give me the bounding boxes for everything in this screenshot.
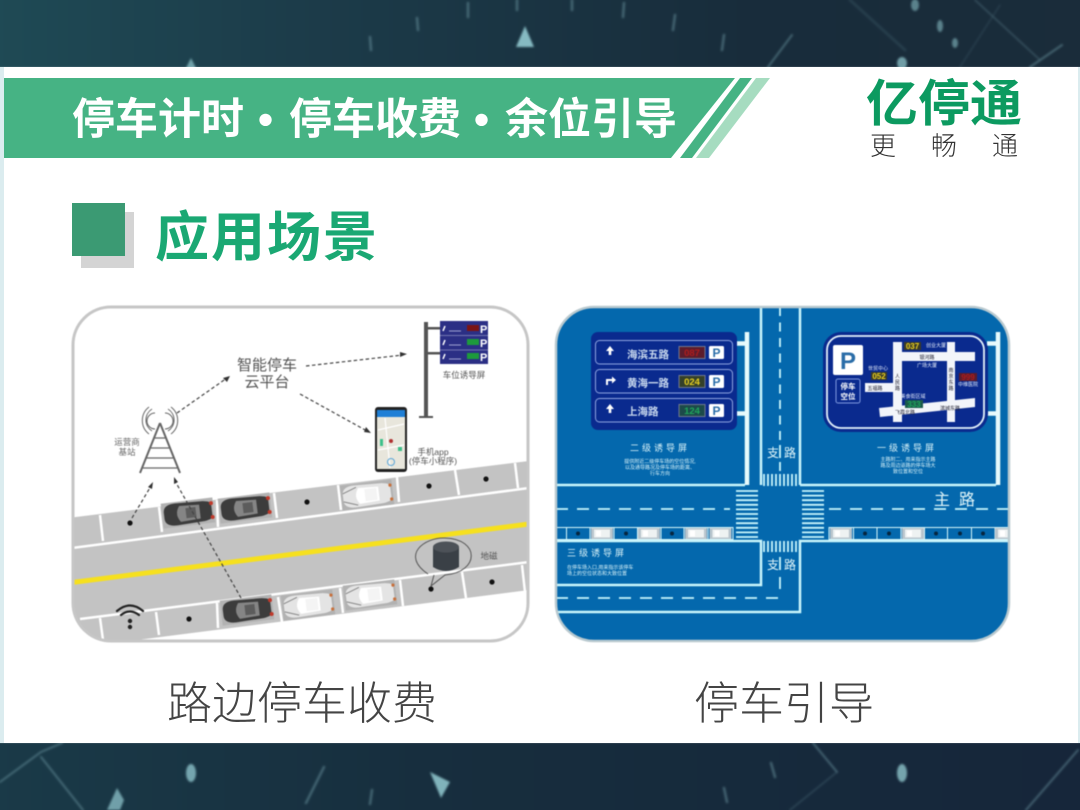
panel border <box>556 307 1009 641</box>
secondary caption <box>624 442 696 477</box>
screen label: 车位诱导屏 <box>443 370 486 380</box>
primary guidance sign: 民 <box>895 380 900 386</box>
caption: parking guidance: 停车引导 <box>694 678 874 729</box>
primary caption: 致位置和空位 <box>893 468 923 475</box>
primary guidance sign: 停车 <box>840 381 856 391</box>
parking strip <box>556 528 1017 540</box>
arrows: data flow <box>132 352 407 598</box>
phone label: (停车小程序) <box>409 456 457 466</box>
guidance screen on pole: P <box>480 338 487 350</box>
icon: phone app <box>375 407 407 472</box>
secondary guidance sign: 087 <box>684 348 700 359</box>
secondary caption: 提供附近二级停车场的空位情况, <box>624 458 696 465</box>
guidance screen on pole: P <box>480 324 487 336</box>
heading marker icon <box>72 203 134 268</box>
cloud platform label: 云平台 <box>244 374 290 391</box>
primary guidance sign: 空位 <box>840 391 856 401</box>
tower label: 运营商 <box>114 437 140 447</box>
primary guidance sign: 创业大厦 <box>926 342 946 349</box>
road labels: 支 <box>767 558 779 572</box>
panel border <box>73 307 528 641</box>
secondary guidance sign: 024 <box>684 377 701 388</box>
logo slogan: 畅 <box>931 131 957 161</box>
tertiary caption: 在停车场入口,用来指示该停车 <box>567 564 633 571</box>
primary guidance sign <box>823 332 988 432</box>
primary guidance sign: 999 <box>961 373 975 382</box>
secondary guidance sign: 海滨五路 <box>627 348 669 361</box>
icon: geomagnetic sensor <box>416 538 471 586</box>
tertiary caption: 场上的空位状态和大致位置 <box>567 570 627 577</box>
secondary caption: 二级诱导屏 <box>630 442 690 453</box>
primary guidance sign: 路 <box>948 385 954 392</box>
primary guidance sign: 京 <box>948 373 954 380</box>
guidance screen on pole: P <box>480 352 487 364</box>
logo <box>866 76 1022 161</box>
phone label: 手机app <box>417 447 449 457</box>
banner title: • <box>474 96 489 144</box>
primary guidance sign: 滨城东路 <box>940 405 960 412</box>
primary caption: 一级诱导屏 <box>877 442 937 453</box>
cloud platform label: 智能停车 <box>237 356 297 374</box>
primary guidance sign: 东 <box>948 379 954 386</box>
secondary guidance sign: P <box>712 375 721 389</box>
sensor label: 地磁 <box>480 551 498 561</box>
yellow centre line <box>72 524 529 582</box>
road labels: 路 <box>959 491 975 509</box>
primary guidance sign: 南 <box>948 367 954 374</box>
road scene <box>72 461 529 650</box>
banner title: • <box>258 96 273 144</box>
guidance screen on pole <box>419 321 488 418</box>
road labels: 路 <box>784 445 796 460</box>
primary guidance sign: 美食街区域 <box>900 393 926 400</box>
secondary guidance sign <box>591 332 737 430</box>
guidance captions <box>567 442 937 577</box>
parked cars <box>161 479 397 626</box>
logo slogan: 更 <box>870 131 896 161</box>
primary guidance sign: 银河路 <box>919 354 935 361</box>
secondary guidance sign: 上海路 <box>627 405 659 418</box>
logo slogan: 通 <box>992 131 1018 161</box>
tertiary caption <box>567 547 633 577</box>
background: dark tech top band <box>0 0 1080 69</box>
primary guidance sign: 333 <box>907 400 921 409</box>
background: dark tech bottom band <box>0 742 1080 810</box>
secondary caption: 以及通导路况及停车场的距离、 <box>625 464 695 471</box>
secondary guidance sign: 124 <box>684 406 701 417</box>
secondary caption: 行车方向 <box>650 470 670 477</box>
banner title: 停车收费 <box>289 96 461 144</box>
crosswalks <box>736 491 758 537</box>
primary guidance sign: 中维医院 <box>958 381 978 388</box>
banner title: 余位引导 <box>505 96 677 144</box>
primary caption: 主路附二、用来指示主路 <box>880 456 936 463</box>
road network <box>555 307 1010 612</box>
panel: parking guidance <box>555 307 1017 641</box>
panel: roadside parking <box>72 307 529 650</box>
secondary guidance sign: 黄海一路 <box>627 376 669 390</box>
primary caption: 路及周边道路的停车场大 <box>880 462 936 469</box>
road labels: 路 <box>784 557 796 572</box>
header banner <box>4 78 770 158</box>
primary guidance sign: 世贸中心 <box>868 365 888 372</box>
primary caption <box>877 442 937 475</box>
primary guidance sign: 五福路 <box>867 385 883 392</box>
tertiary caption: 三级诱导屏 <box>567 547 627 558</box>
heading text: 应用场景 <box>155 208 377 268</box>
primary guidance sign: 037 <box>906 342 920 351</box>
primary guidance sign: 飞霞北路 <box>895 409 915 416</box>
secondary guidance sign: P <box>712 346 721 360</box>
road labels: 支 <box>767 446 779 460</box>
secondary guidance sign: P <box>712 404 721 418</box>
icon: wifi <box>117 606 143 629</box>
primary guidance sign: 路 <box>895 385 900 392</box>
icon: cell tower <box>140 407 180 473</box>
banner title: 停车计时 <box>72 96 244 144</box>
primary guidance sign: 广场大厦 <box>917 362 937 369</box>
road labels <box>767 445 975 572</box>
section heading <box>72 203 377 268</box>
primary guidance sign: P <box>840 348 856 375</box>
tower label: 基站 <box>118 447 136 457</box>
road labels: 主 <box>934 491 950 509</box>
caption: roadside parking: 路边停车收费 <box>167 678 437 729</box>
primary guidance sign: 052 <box>872 372 886 381</box>
primary guidance sign: 人 <box>895 374 900 380</box>
logo name: 亿停通 <box>866 76 1022 132</box>
